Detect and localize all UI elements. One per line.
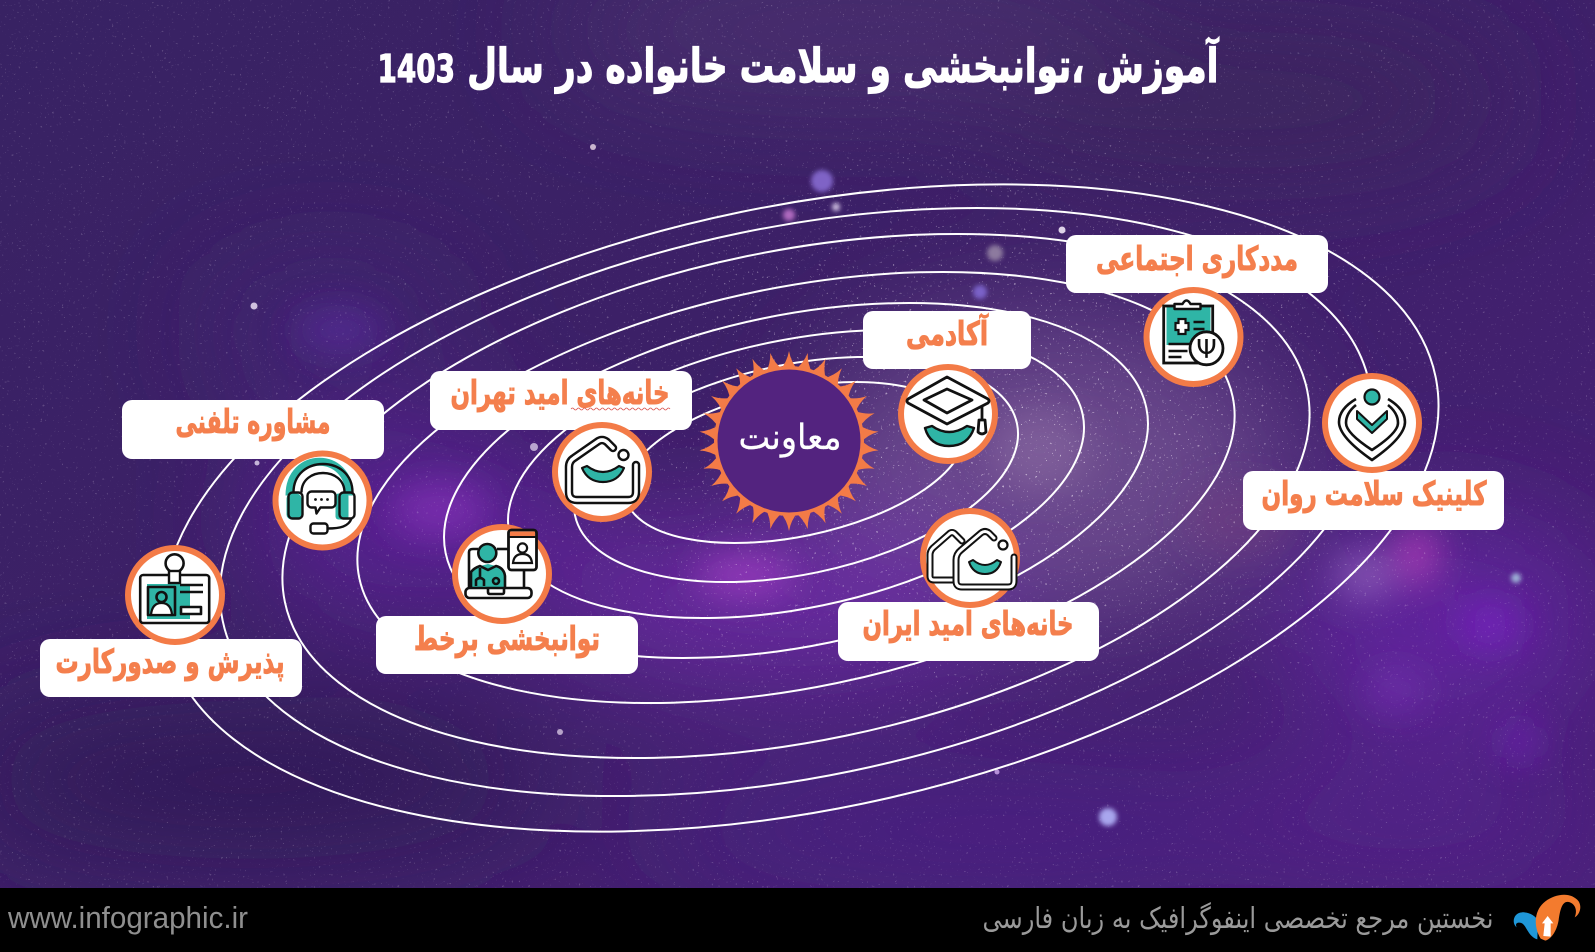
label: مشاوره تلفنی (122, 400, 384, 459)
icon: two homes Iran (923, 511, 1017, 605)
orbits (105, 81, 1497, 935)
icon: clipboard psychology (1146, 290, 1240, 384)
node: خانه‌های امید تهران (430, 371, 692, 519)
label: توانبخشی برخط: توانبخشی برخط (414, 619, 600, 659)
label: پذیرش و صدورکارت (40, 639, 302, 697)
label: خانه‌های امید ایران: خانه‌های امید ایران (862, 604, 1074, 644)
icon: home hope Tehran (555, 425, 649, 519)
label: خانه‌های امید تهران: خانه‌های امید تهران (450, 373, 670, 413)
icon: mental health clinic (1325, 376, 1419, 470)
node: مشاوره تلفنی (122, 400, 384, 548)
node: توانبخشی برخط (376, 527, 638, 674)
central sun: معاونت: معاونت (738, 418, 842, 458)
label: توانبخشی برخط (376, 616, 638, 674)
label: کلینیک سلامت روان: کلینیک سلامت روان (1262, 474, 1487, 514)
title: آموزش ،توانبخشی و سلامت خانواده در سال 1403 (378, 36, 1220, 94)
icon: headset (276, 454, 370, 548)
label: کلینیک سلامت روان (1243, 471, 1504, 530)
node: کلینیک سلامت روان (1243, 376, 1504, 530)
icon: online doctor (455, 527, 549, 621)
label: خانه‌های امید ایران (838, 602, 1099, 661)
icon: ID card (128, 548, 222, 642)
label: مشاوره تلفنی: مشاوره تلفنی (176, 402, 330, 442)
label: آکادمی (863, 311, 1031, 369)
footer logo (1514, 895, 1580, 941)
label: خانه‌های امید تهران (430, 371, 692, 430)
icon: clipboard psychology: Ψ (1196, 335, 1217, 365)
central sun: معاونت (699, 351, 879, 531)
label: پذیرش و صدورکارت: پذیرش و صدورکارت (56, 642, 284, 682)
label: مددکاری اجتماعی (1066, 235, 1328, 293)
node: پذیرش و صدورکارت (40, 548, 302, 697)
footer website: www.infographic.ir (7, 900, 248, 935)
label: مددکاری اجتماعی: مددکاری اجتماعی (1096, 239, 1298, 278)
icon: graduation cap (901, 367, 995, 461)
node: مددکاری اجتماعی (1066, 235, 1328, 384)
footer bar (0, 888, 1595, 952)
footer tagline: نخستین مرجع تخصصی اینفوگرافیک به زبان فارسی (982, 901, 1494, 935)
node: آکادمی (863, 311, 1031, 461)
label: آکادمی: آکادمی (906, 313, 988, 353)
node: خانه‌های امید ایران (838, 511, 1099, 661)
